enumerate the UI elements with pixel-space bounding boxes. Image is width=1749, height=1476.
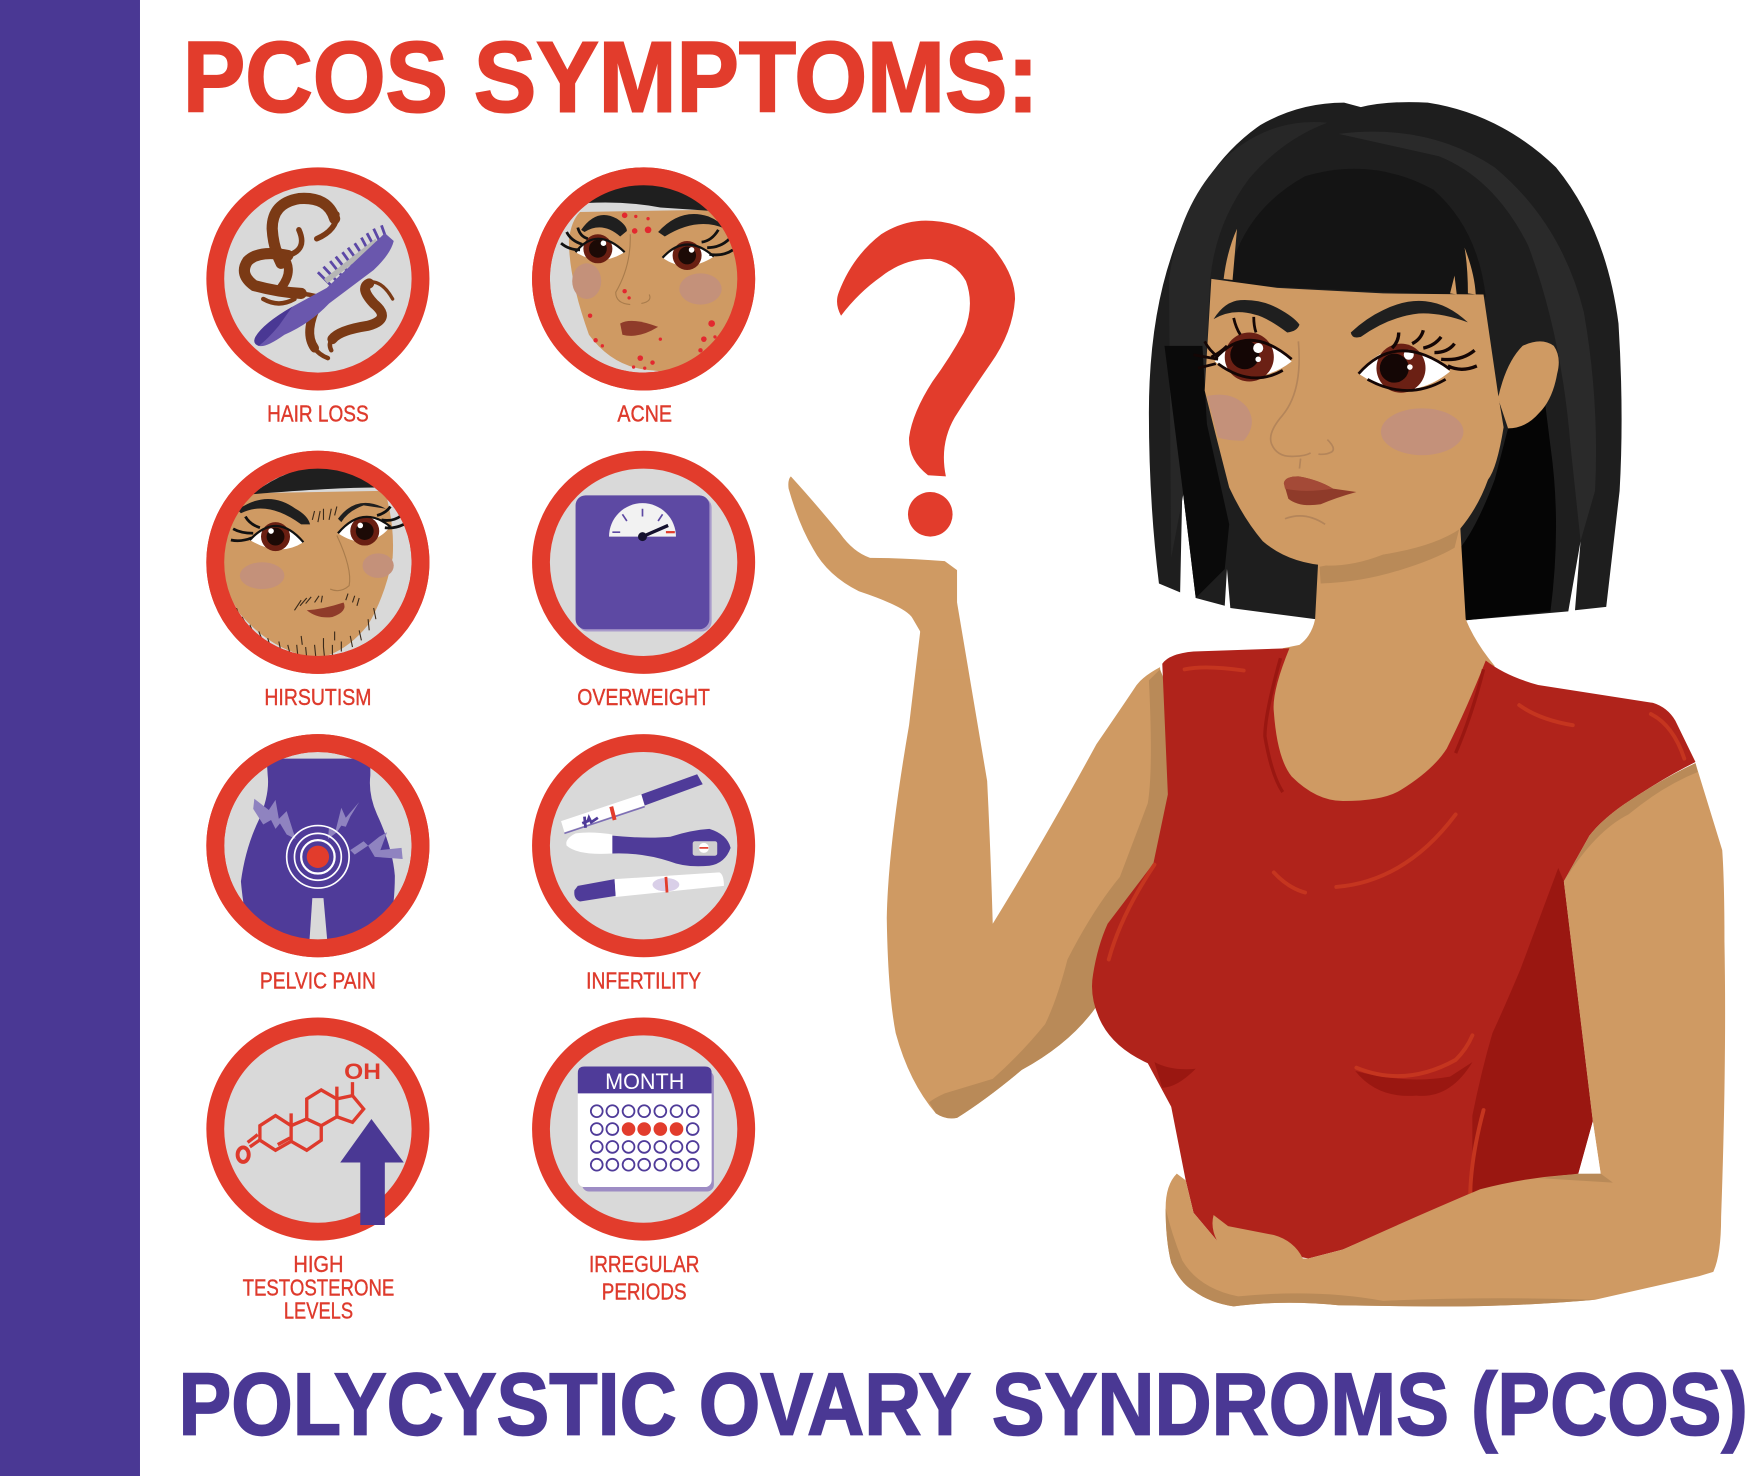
arrow: up <box>340 1119 404 1225</box>
panel: infertility <box>541 743 746 948</box>
left eye <box>1194 317 1292 382</box>
neck <box>1260 524 1495 809</box>
icon: calendar <box>578 1067 714 1192</box>
blush <box>1207 395 1463 455</box>
label: high testosterone levels <box>243 1251 394 1324</box>
icon: test strip top <box>561 774 703 833</box>
panel: hirsutism <box>215 460 421 665</box>
hair <box>1149 102 1622 620</box>
lips <box>1284 476 1356 524</box>
title: PCOS SYMPTOMS: <box>183 22 1038 134</box>
icon: bathroom scale <box>576 495 712 631</box>
icon: digital test <box>566 829 731 866</box>
sidebar <box>0 0 140 1476</box>
question mark <box>837 221 1015 537</box>
month heading: MONTH <box>605 1069 684 1094</box>
panel: acne <box>541 176 746 382</box>
label: high testosterone levels: LEVELS <box>284 1298 353 1324</box>
panel: irregular periods <box>541 1026 746 1232</box>
icon: acne face <box>561 182 741 371</box>
icon: testosterone molecule <box>238 1082 364 1162</box>
label: acne: ACNE <box>617 401 672 427</box>
hand <box>788 476 965 669</box>
label: infertility: INFERTILITY <box>586 967 701 993</box>
panel: pelvic pain <box>215 743 421 948</box>
panel: overweight <box>541 460 746 665</box>
red top <box>1092 648 1695 1258</box>
woman figure <box>788 102 1725 1307</box>
label: irregular periods: PERIODS <box>602 1279 687 1305</box>
icon: torso with pain target <box>241 759 403 948</box>
label: irregular periods: IRREGULAR <box>589 1251 699 1277</box>
label: OH: OH <box>344 1059 381 1084</box>
label: pelvic pain: PELVIC PAIN <box>260 967 376 993</box>
bangs <box>1227 169 1486 297</box>
icon: test strip bottom <box>574 872 724 901</box>
folded arm <box>1166 763 1725 1307</box>
nose <box>1271 341 1333 469</box>
face <box>1205 279 1504 566</box>
ear <box>1498 341 1559 428</box>
label: high testosterone levels: HIGH <box>293 1251 344 1277</box>
day dots <box>591 1105 699 1171</box>
label: high testosterone levels: TESTOSTERONE <box>243 1274 394 1300</box>
label: irregular periods <box>589 1251 699 1305</box>
eyebrows <box>1214 300 1468 337</box>
right eye <box>1359 330 1477 393</box>
label: overweight: OVERWEIGHT <box>577 684 710 710</box>
label: hirsutism: HIRSUTISM <box>264 684 371 710</box>
icon: hair brush <box>254 225 394 346</box>
panel: high testosterone <box>215 1026 421 1232</box>
far arm and shoulder <box>887 602 1182 1118</box>
label: hair loss: HAIR LOSS <box>267 401 369 427</box>
icon: hirsutism face <box>220 466 404 658</box>
panel: hair loss <box>215 176 421 382</box>
icon: hair strands <box>244 198 393 358</box>
